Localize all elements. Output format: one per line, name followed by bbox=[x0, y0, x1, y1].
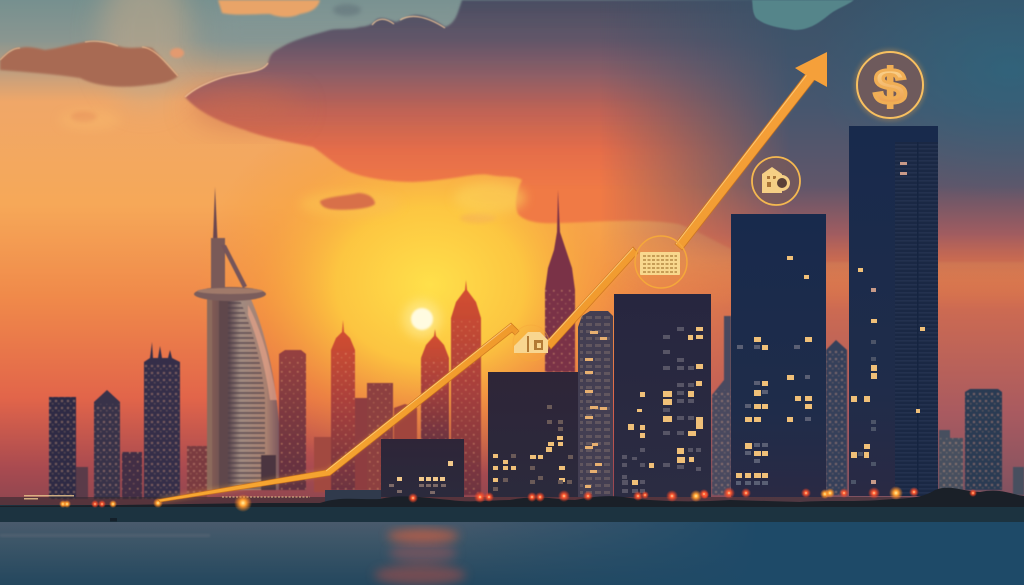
tower: sail-shaped landmark bbox=[194, 187, 281, 490]
cloud: top centre bbox=[218, 0, 320, 17]
water bbox=[0, 522, 1024, 585]
cloud rim light bbox=[185, 16, 445, 97]
towers: far left bbox=[49, 342, 207, 499]
tower: tall block bbox=[731, 214, 826, 497]
arrow head bbox=[795, 52, 827, 87]
sun bbox=[403, 300, 441, 338]
tower: low block centre bbox=[381, 439, 464, 497]
small clouds bbox=[0, 0, 526, 223]
sun reflection bbox=[374, 529, 466, 585]
cloud: upper left bbox=[0, 41, 178, 87]
distant towers bbox=[49, 187, 1024, 499]
right sky shading bbox=[610, 0, 1024, 497]
icon: dollar coin bbox=[854, 49, 926, 121]
large storm cloud bbox=[185, 0, 1024, 262]
icon: house marker bbox=[513, 325, 549, 361]
arrow glow bbox=[160, 76, 812, 500]
growth arrow bbox=[158, 52, 827, 502]
sky gap in cloud bbox=[752, 0, 854, 30]
tower: grey slab bbox=[578, 311, 613, 497]
towers: far right bbox=[712, 316, 1024, 495]
icon: calendar marker bbox=[635, 236, 687, 288]
icon: building and coin badge bbox=[752, 157, 800, 205]
tower: tallest block bbox=[849, 126, 938, 496]
foreground towers bbox=[381, 126, 938, 497]
towers: red midtown bbox=[279, 190, 575, 495]
tower: large windowed block bbox=[614, 294, 711, 497]
waterfront strip bbox=[0, 488, 1024, 522]
cloud warm left glow bbox=[190, 88, 300, 128]
arrow shaft bbox=[158, 71, 816, 502]
shoreline lights bbox=[59, 486, 977, 512]
dollar sign: $ bbox=[874, 58, 906, 115]
tower: dark block bbox=[488, 372, 578, 497]
